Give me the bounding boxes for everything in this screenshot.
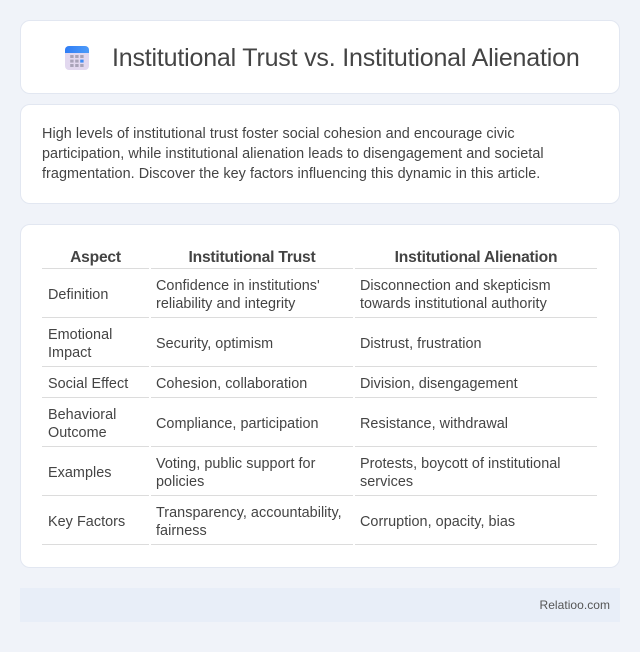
icon: calendar [65, 46, 89, 70]
row: definition [42, 278, 597, 318]
row: key factors [42, 505, 597, 545]
row: definition: Definition [48, 287, 108, 303]
panel: intro [20, 104, 620, 204]
panel: comparison table [20, 224, 620, 568]
row: key factors: Corruption, opacity, bias [360, 514, 515, 530]
row: emotional impact: Security, optimism [156, 336, 273, 352]
row: behavioral outcome [42, 407, 597, 447]
row: behavioral outcome: Compliance, participation [156, 416, 319, 432]
row: social effect: Cohesion, collaboration [156, 376, 307, 392]
row: examples: policies [156, 474, 204, 490]
title: Institutional Trust vs. Institutional Alienation [112, 44, 580, 72]
row: emotional impact: Impact [48, 345, 91, 361]
table header: Aspect [70, 249, 121, 266]
row: behavioral outcome: Resistance, withdrawal [360, 416, 508, 432]
row: emotional impact: Distrust, frustration [360, 336, 482, 352]
row: behavioral outcome: Outcome [48, 425, 107, 441]
row: examples: Voting, public support for [156, 456, 315, 472]
intro text [42, 126, 544, 182]
intro text: High levels of institutional trust foster social cohesion and encourage civic [42, 126, 515, 142]
table header [42, 249, 597, 269]
row: social effect: Division, disengagement [360, 376, 518, 392]
row: emotional impact: Emotional [48, 327, 112, 343]
row: examples [42, 456, 597, 496]
row: key factors: Key Factors [48, 514, 125, 530]
table header: Institutional Alienation [395, 249, 557, 266]
row: examples: Examples [48, 465, 112, 481]
table header: Institutional Trust [188, 249, 316, 266]
row: definition: Disconnection and skepticism [360, 278, 551, 294]
row: social effect: Social Effect [48, 376, 128, 392]
row: examples: services [360, 474, 413, 490]
row: behavioral outcome: Behavioral [48, 407, 116, 423]
intro text: fragmentation. Discover the key factors influencing this dynamic in this article. [42, 166, 540, 182]
intro text: participation, while institutional alienation leads to disengagement and societal [42, 146, 544, 162]
row: definition: reliability and integrity [156, 296, 295, 312]
row: definition: Confidence in institutions' [156, 278, 320, 294]
panel: header [20, 20, 620, 94]
footer bar [20, 588, 620, 622]
row: social effect [42, 376, 597, 398]
row: key factors: Transparency, accountability, [156, 505, 342, 521]
row: examples: Protests, boycott of institutional [360, 456, 561, 472]
row: key factors: fairness [156, 523, 207, 539]
row: definition: towards institutional authority [360, 296, 547, 312]
footer credit: Relatioo.com [539, 598, 610, 612]
row: emotional impact [42, 327, 597, 367]
